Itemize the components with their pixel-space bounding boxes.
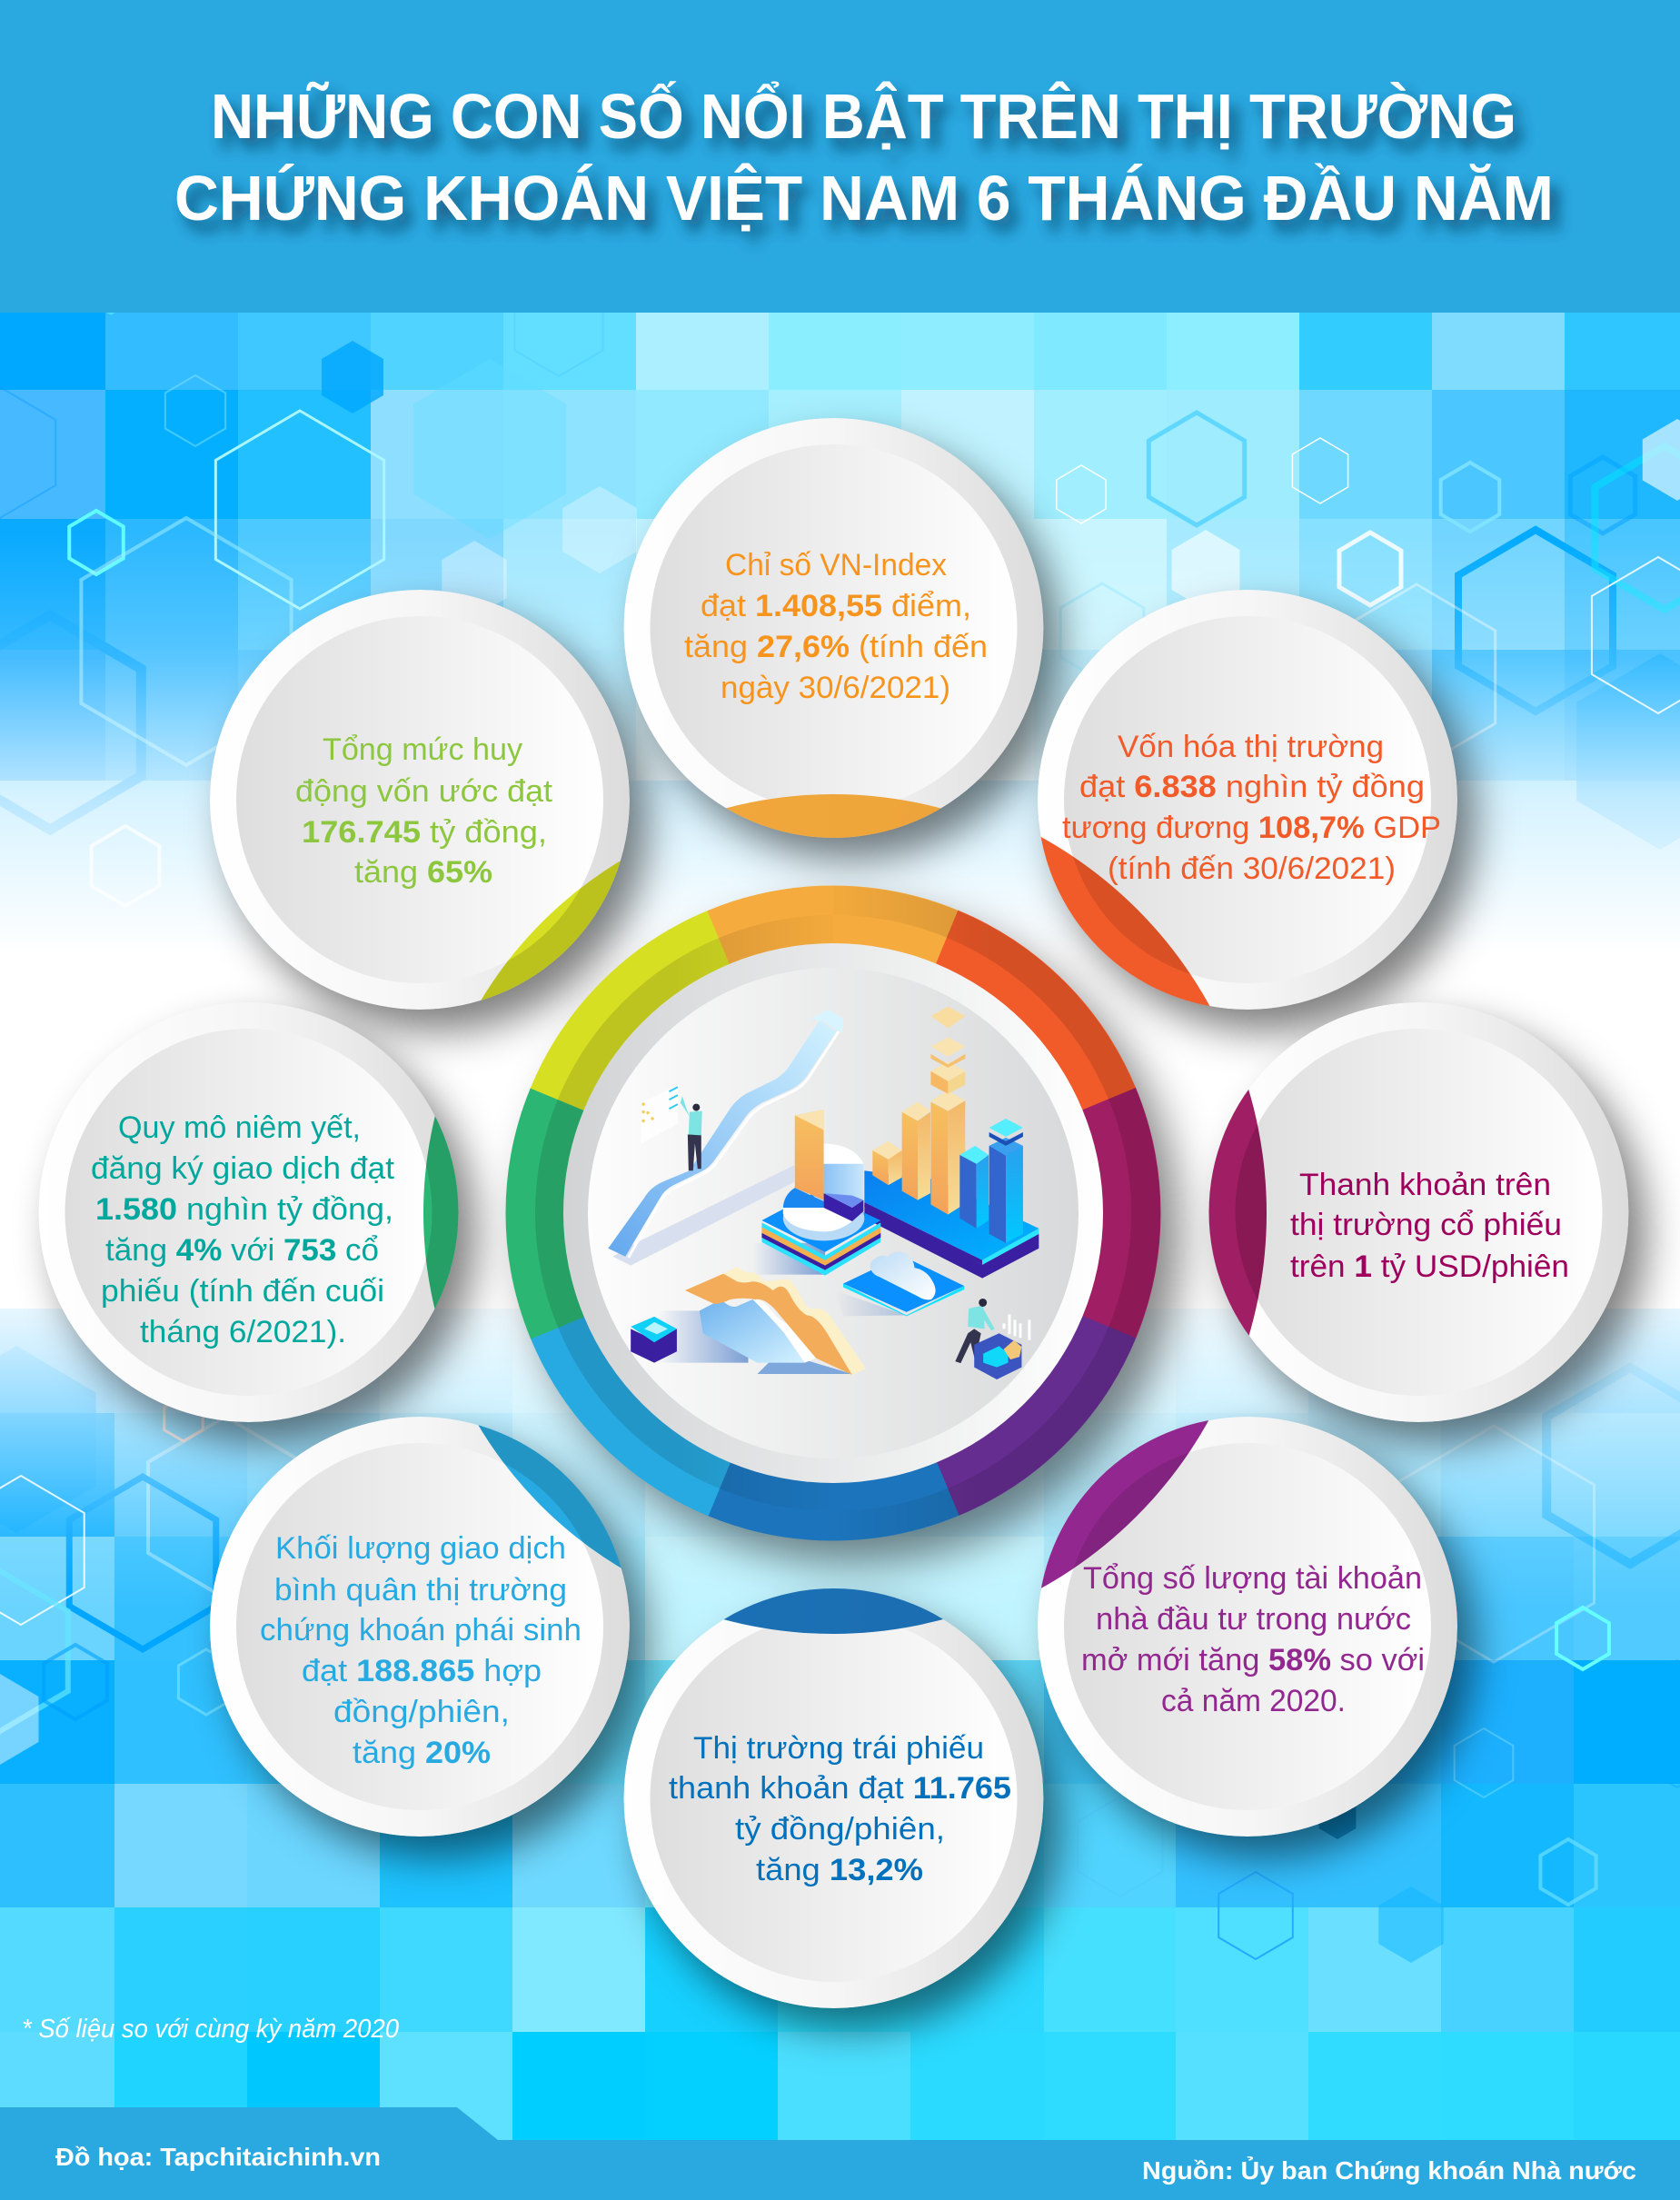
text: investor accounts xyxy=(1081,1561,1425,1718)
rising arrow xyxy=(608,1010,843,1258)
text: derivatives volume: đồng/phiên, xyxy=(333,1695,510,1729)
text: listing size: đăng ký giao dịch đạt xyxy=(91,1151,394,1186)
text: listing size: tăng 4% với 753 cổ xyxy=(105,1233,379,1268)
text: VN-Index xyxy=(684,548,988,705)
panel: VN-Index xyxy=(623,418,1043,838)
text: listing size: phiếu (tính đến cuối xyxy=(101,1274,384,1309)
text: derivatives volume xyxy=(260,1531,582,1770)
text: derivatives volume: đạt 188.865 hợp xyxy=(302,1654,542,1688)
text: stock liquidity: trên 1 tỷ USD/phiên xyxy=(1290,1249,1569,1284)
text: market capitalisation: (tính đến 30/6/2021) xyxy=(1108,851,1396,886)
background hexagons xyxy=(0,250,1680,1963)
text: derivatives volume: tăng 20% xyxy=(353,1736,491,1770)
climbing man xyxy=(681,1096,702,1170)
text: capital mobilised: tăng 65% xyxy=(354,855,492,890)
panel: capital mobilised xyxy=(210,590,630,1010)
text: capital mobilised: 176.745 tỷ đồng, xyxy=(302,815,547,850)
isometric market illustration xyxy=(608,1007,1039,1379)
text: derivatives volume: Khối lượng giao dịch xyxy=(275,1531,566,1566)
text: stock liquidity: Thanh khoản trên xyxy=(1299,1168,1551,1202)
text: VN-Index: ngày 30/6/2021) xyxy=(721,671,950,705)
man with cubes xyxy=(955,1299,1029,1379)
text: VN-Index: Chỉ số VN-Index xyxy=(725,548,947,582)
text: listing size: tháng 6/2021). xyxy=(140,1315,346,1349)
text: bond market xyxy=(669,1731,1011,1887)
panel: bond market xyxy=(623,1588,1043,2008)
mountain chart xyxy=(658,1267,866,1375)
panel: derivatives volume xyxy=(210,1417,630,1837)
text: bond market: Thị trường trái phiếu xyxy=(693,1731,984,1766)
text: market capitalisation: đạt 6.838 nghìn tỷ đồng xyxy=(1079,770,1425,804)
panel: investor accounts xyxy=(1038,1417,1457,1837)
pie chart stack xyxy=(752,1110,880,1276)
panel: stock liquidity xyxy=(1208,1002,1628,1422)
header band xyxy=(0,0,1680,313)
dashboard tile xyxy=(641,1085,678,1143)
title: CHỨNG KHOÁN VIỆT NAM 6 THÁNG ĐẦU NĂM xyxy=(174,162,1554,234)
text: capital mobilised xyxy=(295,732,552,890)
text: listing size: 1.580 nghìn tỷ đồng, xyxy=(95,1192,393,1227)
center ring xyxy=(443,823,1223,1603)
panel: listing size xyxy=(38,1003,458,1422)
drop shadows of circles xyxy=(56,440,1646,2030)
text: market capitalisation xyxy=(1062,730,1441,886)
text: listing size xyxy=(91,1110,394,1349)
text: investor accounts: mở mới tăng 58% so với xyxy=(1081,1643,1425,1677)
text: market capitalisation: tương đương 108,7% GDP xyxy=(1062,811,1441,845)
title xyxy=(174,80,1554,234)
arrow floor shadow xyxy=(612,1165,794,1266)
white fade overlays xyxy=(0,532,1680,1608)
large platform xyxy=(864,1170,1039,1279)
credit: Đồ họa: Tapchitaichinh.vn xyxy=(55,2143,381,2171)
text: VN-Index: đạt 1.408,55 điểm, xyxy=(701,589,971,623)
text: bond market: thanh khoản đạt 11.765 xyxy=(669,1771,1011,1806)
text: derivatives volume: bình quân thị trường xyxy=(274,1573,567,1608)
source: Nguồn: Ủy ban Chứng khoán Nhà nước xyxy=(1142,2155,1636,2185)
text: stock liquidity xyxy=(1290,1168,1569,1284)
orange bars xyxy=(872,1007,965,1214)
footer band xyxy=(0,2107,1680,2200)
blue bars xyxy=(959,1119,1023,1243)
text: investor accounts: nhà đầu tư trong nước xyxy=(1096,1602,1411,1637)
text: listing size: Quy mô niêm yết, xyxy=(118,1110,361,1145)
text: investor accounts: cả năm 2020. xyxy=(1161,1684,1346,1718)
text: investor accounts: Tổng số lượng tài khoản xyxy=(1083,1561,1422,1596)
center white disc xyxy=(563,943,1103,1483)
text: derivatives volume: chứng khoán phái sinh xyxy=(260,1613,582,1648)
text: capital mobilised: Tổng mức huy xyxy=(323,732,523,767)
text: VN-Index: tăng 27,6% (tính đến xyxy=(684,630,988,664)
text: stock liquidity: thị trường cổ phiếu xyxy=(1290,1208,1562,1242)
title: NHỮNG CON SỐ NỔI BẬT TRÊN THỊ TRƯỜNG xyxy=(211,80,1516,152)
panel: market capitalisation xyxy=(1038,590,1457,1010)
small stack xyxy=(631,1317,677,1363)
text: capital mobilised: động vốn ước đạt xyxy=(295,774,552,809)
text: bond market: tỷ đồng/phiên, xyxy=(735,1812,945,1847)
footnote: * Số liệu so với cùng kỳ năm 2020 xyxy=(22,2015,399,2044)
text: bond market: tăng 13,2% xyxy=(756,1853,923,1887)
cloud card xyxy=(834,1252,964,1316)
text: market capitalisation: Vốn hóa thị trường xyxy=(1118,730,1384,764)
center ring shadow xyxy=(526,910,1180,1564)
